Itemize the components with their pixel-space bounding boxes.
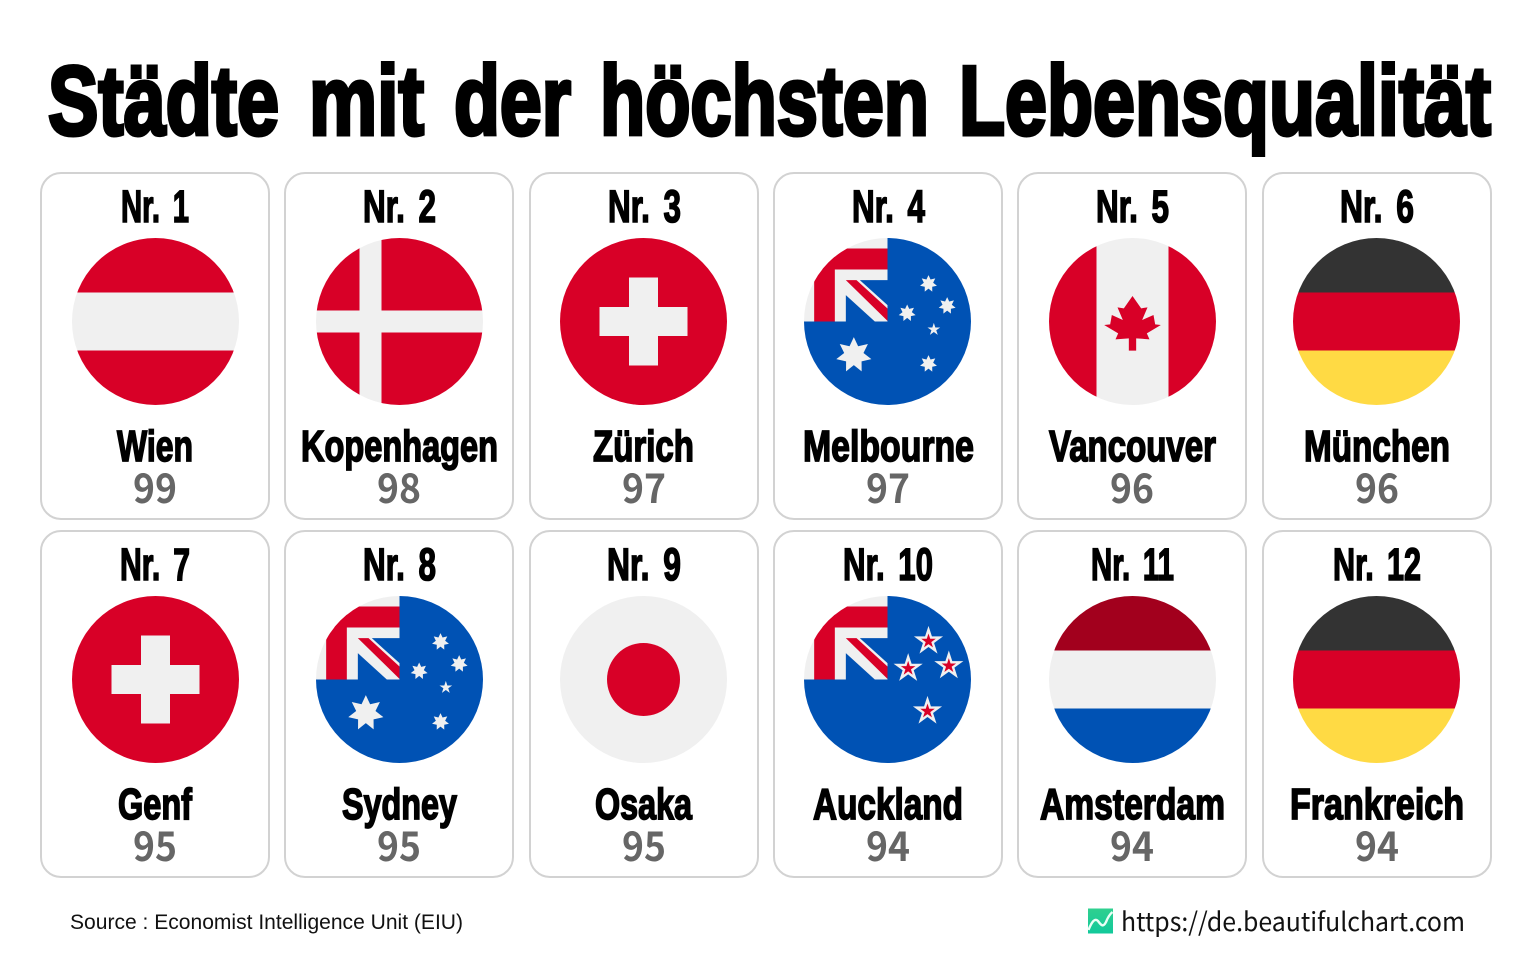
icon: beautifulchart logo	[1088, 908, 1113, 934]
rank: Nr. 7: Nr. 7	[120, 539, 190, 590]
panel: Nr. 2 Kopenhagen	[285, 173, 513, 519]
panel: Nr. 4 Melbourne	[774, 173, 1002, 519]
score: 97: 97	[866, 455, 910, 515]
city: Vancouver: Vancouver	[1049, 422, 1216, 471]
city: Frankreich: Frankreich	[1290, 780, 1464, 829]
icon: flag of Austria	[72, 238, 240, 406]
panel: Nr. 12 Frankreich	[1263, 531, 1491, 877]
icon: flag of New Zealand	[804, 596, 971, 763]
score: 96: 96	[1110, 455, 1154, 515]
rank: Nr. 6: Nr. 6	[1340, 181, 1414, 232]
panel: Nr. 9 Osaka	[530, 531, 758, 877]
panel: Nr. 10 Auckland	[774, 531, 1002, 877]
city: Kopenhagen: Kopenhagen	[301, 422, 498, 471]
rank: Nr. 8: Nr. 8	[363, 539, 436, 590]
icon: flag of Germany	[1292, 238, 1460, 406]
score: 96: 96	[1355, 455, 1399, 515]
city: München: München	[1304, 422, 1450, 471]
title: der	[454, 46, 571, 156]
rank: Nr. 4: Nr. 4	[852, 181, 925, 232]
city: Genf: Genf	[118, 780, 192, 829]
rank: Nr. 3: Nr. 3	[608, 181, 681, 232]
icon: flag of Japan	[560, 596, 727, 763]
rank: Nr. 2: Nr. 2	[363, 181, 436, 232]
city: Auckland: Auckland	[813, 780, 963, 829]
score: 98: 98	[377, 455, 421, 515]
rank: Nr. 1: Nr. 1	[121, 181, 189, 232]
score: 94: 94	[1110, 813, 1154, 873]
score: 94: 94	[1355, 813, 1399, 873]
score: 95: 95	[377, 813, 421, 873]
panel: Nr. 8 Sydney	[285, 531, 513, 877]
score: 94: 94	[866, 813, 910, 873]
rank: Nr. 5: Nr. 5	[1096, 181, 1169, 232]
panel: Nr. 3 Zürich	[530, 173, 758, 519]
rank: Nr. 10: Nr. 10	[843, 539, 933, 590]
score: 95: 95	[133, 813, 177, 873]
icon: flag of Switzerland	[560, 238, 728, 406]
rank: Nr. 9: Nr. 9	[607, 539, 681, 590]
icon: flag of Denmark	[316, 238, 484, 406]
rank: Nr. 11: Nr. 11	[1091, 539, 1174, 590]
rank: Nr. 12: Nr. 12	[1333, 539, 1421, 590]
panel: Nr. 1 Wien	[41, 173, 269, 519]
city: Zürich: Zürich	[593, 422, 694, 471]
score: 97: 97	[622, 455, 666, 515]
panel: Nr. 7 Genf	[41, 531, 269, 877]
source note: Source : Economist Intelligence Unit (EIU)	[70, 910, 463, 934]
icon: flag of Canada	[1048, 238, 1216, 406]
icon: flag of the Netherlands	[1048, 596, 1216, 764]
title: mit	[309, 46, 424, 156]
city: Osaka: Osaka	[595, 780, 692, 829]
title: höchsten	[600, 46, 929, 156]
score: 95: 95	[622, 813, 666, 873]
panel: Nr. 5 Vancouver	[1018, 173, 1246, 519]
icon: flag of Australia	[316, 596, 483, 763]
title	[48, 46, 1491, 156]
title: Städte	[48, 46, 279, 156]
icon: flag of Switzerland	[72, 596, 240, 764]
city: Wien: Wien	[117, 422, 193, 471]
city: Melbourne: Melbourne	[803, 422, 974, 471]
panel: Nr. 6 München	[1263, 173, 1491, 519]
panel: Nr. 11 Amsterdam	[1018, 531, 1246, 877]
website url: https://de.beautifulchart.com	[1121, 902, 1465, 939]
score: 99: 99	[133, 455, 177, 515]
city: Amsterdam: Amsterdam	[1040, 780, 1225, 829]
icon: flag of Australia	[804, 238, 971, 405]
icon: flag of Germany	[1292, 596, 1460, 764]
city: Sydney: Sydney	[342, 780, 457, 829]
